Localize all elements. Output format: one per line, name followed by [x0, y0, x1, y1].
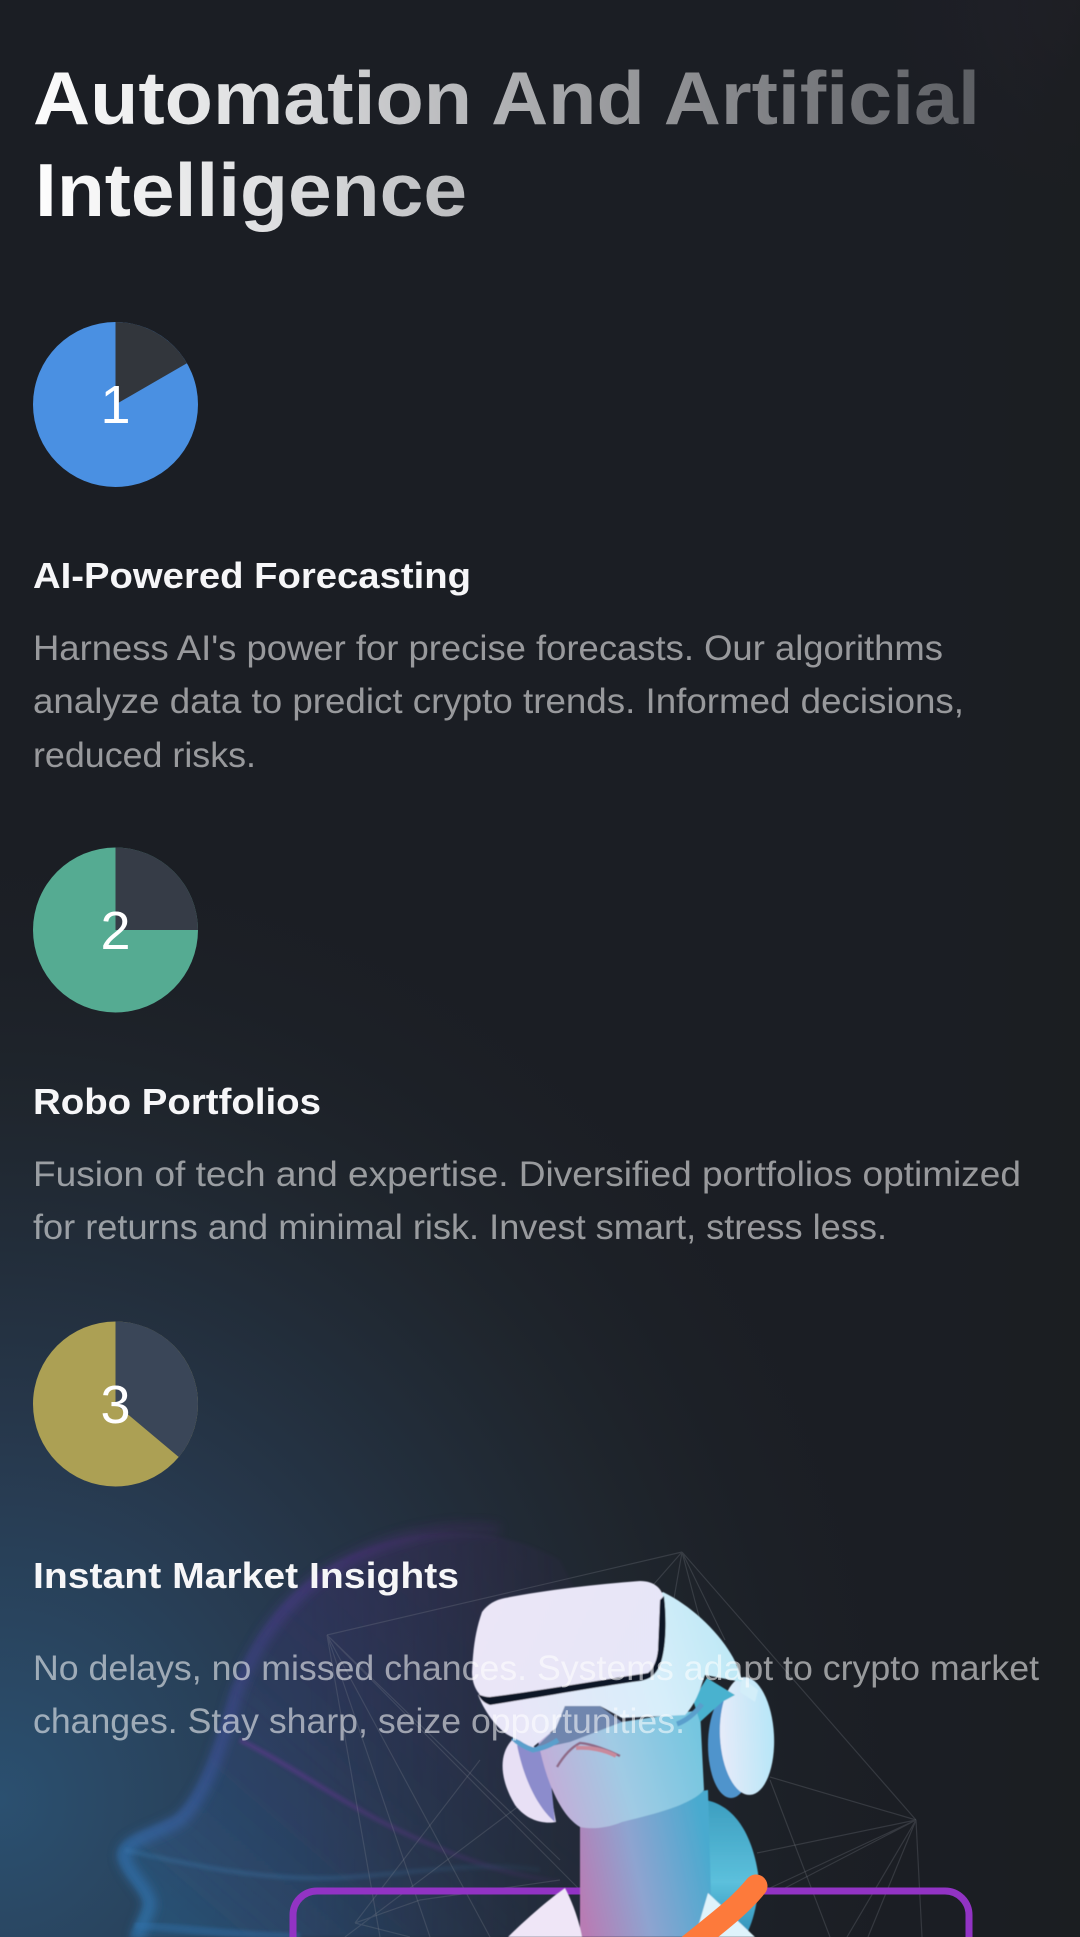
- pie icon 1: [33, 322, 198, 487]
- body 3: No delays, no missed chances. Systems adapt to crypto market: [33, 1649, 1039, 1688]
- nose gap: [533, 1706, 622, 1750]
- strap: [693, 1678, 735, 1722]
- neck: [580, 1790, 711, 1937]
- section 2: Robo Portfolios: [33, 848, 1021, 1247]
- headset front panel: [472, 1581, 663, 1701]
- headset black stripe: [478, 1596, 666, 1705]
- hair: [708, 1800, 759, 1931]
- blue rim: [513, 1704, 702, 1750]
- particle wave silhouette: [114, 1523, 558, 1937]
- headset body: [478, 1592, 742, 1747]
- body 1: Harness AI's power for precise forecasts. Our algorithms: [33, 629, 943, 668]
- right ear cup: [717, 1676, 777, 1796]
- heading 1: AI-Powered Forecasting: [33, 555, 471, 596]
- shirt collar right: [695, 1893, 755, 1937]
- title: Intelligence: [35, 148, 467, 232]
- pie icon 3: [33, 1322, 198, 1486]
- pie icon 2: [33, 848, 198, 1012]
- section 1: AI-Powered Forecasting: [33, 322, 964, 775]
- body 3: [33, 1649, 1039, 1741]
- body 1: analyze data to predict crypto trends. Informed decisions,: [33, 682, 964, 721]
- blue ear band: [707, 1700, 742, 1799]
- face: [537, 1710, 704, 1828]
- orange stroke: [690, 1886, 756, 1937]
- heading 3: Instant Market Insights: [33, 1555, 459, 1596]
- lips: [557, 1743, 620, 1767]
- body 2: [33, 1155, 1021, 1247]
- purple frame: [293, 1891, 969, 1937]
- illustration: VR woman with particle wave and network: [117, 1528, 969, 1937]
- body 3: changes. Stay sharp, seize opportunities.: [33, 1702, 685, 1741]
- body 1: [33, 629, 964, 775]
- woman figure: [472, 1581, 777, 1937]
- heading 2: Robo Portfolios: [33, 1081, 321, 1122]
- body 1: reduced risks.: [33, 736, 256, 775]
- pie icon 1: 1: [100, 375, 131, 435]
- section 3: Instant Market Insights: [33, 1322, 1039, 1741]
- body 2: for returns and minimal risk. Invest smart, stress less.: [33, 1208, 887, 1247]
- pie icon 3: 3: [100, 1375, 131, 1435]
- shirt collar left: [508, 1888, 582, 1937]
- left cup band: [517, 1745, 555, 1822]
- ear connector: [749, 1685, 758, 1701]
- body 2: Fusion of tech and expertise. Diversified portfolios optimized: [33, 1155, 1021, 1194]
- network lines: [327, 1552, 922, 1937]
- left ear cup: [503, 1740, 556, 1823]
- pie icon 2: 2: [100, 901, 131, 961]
- title: Automation And Artificial: [33, 56, 980, 140]
- title: [33, 56, 980, 232]
